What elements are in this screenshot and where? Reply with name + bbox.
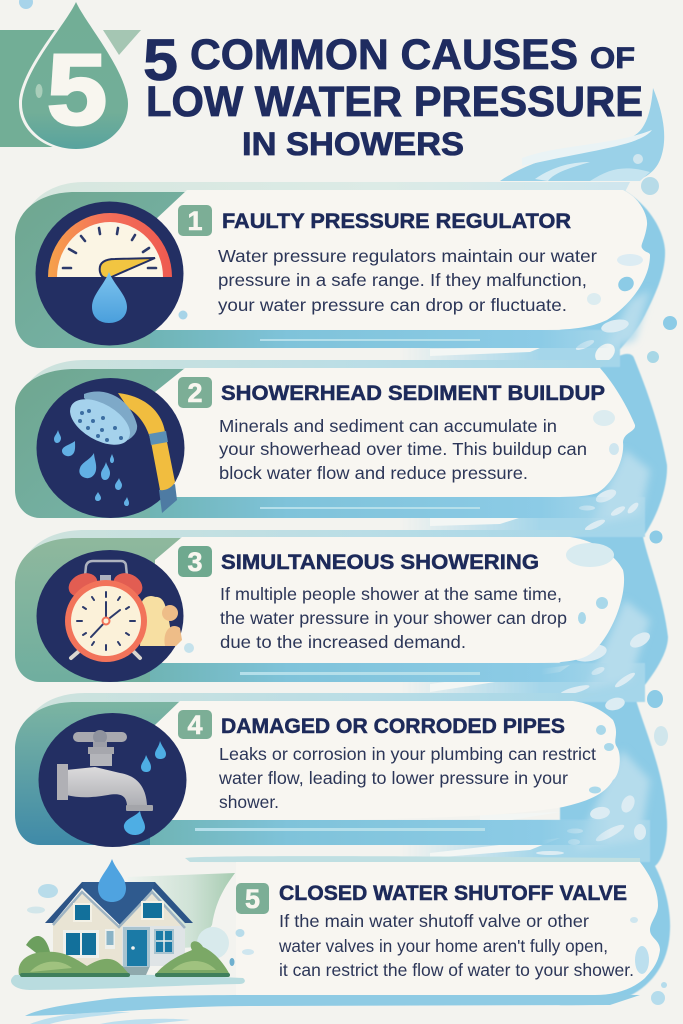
number badge 5 (236, 883, 269, 914)
panel: cause 3 (15, 530, 624, 682)
text block 2: Minerals and sediment can accumulate in (219, 416, 557, 436)
icon: house with water drop (11, 859, 254, 990)
number badge 2 (178, 377, 212, 408)
water highlights and bubbles (430, 317, 653, 858)
number badge 1: 1 (187, 206, 203, 236)
icon: dripping faucet (38, 713, 186, 847)
house bushes (19, 936, 230, 977)
text block 4: water flow, leading to lower pressure in your (218, 768, 568, 788)
text block 2 (219, 416, 587, 483)
number badge 3: 3 (187, 547, 203, 577)
lighter water washes (575, 290, 650, 850)
title (143, 28, 643, 162)
house walls (53, 892, 185, 966)
text block 1: pressure in a safe range. If they malfunction, (218, 270, 587, 290)
panel: cause 5 (25, 856, 660, 1024)
number badge 4 (178, 710, 212, 740)
icon: alarm clock and people (36, 550, 184, 682)
icon: pressure gauge (36, 202, 184, 346)
icon: showerhead (36, 378, 184, 518)
number badge 4: 4 (187, 710, 203, 740)
text block 5: If the main water shutoff valve or other (279, 911, 589, 931)
water stream along right side (400, 190, 670, 1005)
title: 5 (143, 28, 178, 93)
number badge 1 (178, 205, 212, 236)
panel: cause 1 (15, 182, 650, 348)
panel: cause 4 (15, 693, 620, 847)
heading 3: SIMULTANEOUS SHOWERING (221, 551, 539, 574)
top-right wave (500, 88, 664, 181)
heading 4: DAMAGED OR CORRODED PIPES (221, 715, 565, 738)
number badge 3 (178, 546, 212, 577)
heading 1: FAULTY PRESSURE REGULATOR (222, 210, 571, 233)
title: OF (590, 42, 635, 75)
heading 2: SHOWERHEAD SEDIMENT BUILDUP (221, 382, 605, 405)
header drop badge: 5 (47, 34, 107, 146)
text block 5 (278, 911, 634, 980)
water drop on roof (98, 859, 126, 902)
text block 3: due to the increased demand. (220, 632, 466, 652)
number badge 2: 2 (187, 378, 203, 408)
text block 4: shower. (219, 792, 279, 812)
title: IN SHOWERS (242, 126, 464, 162)
house roof (45, 882, 193, 925)
text block 4 (218, 744, 596, 812)
text block 3: the water pressure in your shower can drop (220, 608, 567, 628)
panel: cause 2 (15, 360, 635, 518)
header drop badge (0, 0, 141, 151)
text block 2: block water flow and reduce pressure. (219, 463, 528, 483)
text block 1 (218, 246, 597, 315)
text block 3: If multiple people shower at the same time, (220, 584, 562, 604)
title: LOW WATER PRESSURE (146, 78, 643, 126)
house windows and door (63, 901, 174, 967)
text block 4: Leaks or corrosion in your plumbing can restrict (219, 744, 596, 764)
text block 5: it can restrict the flow of water to your shower. (279, 960, 634, 980)
text block 5: water valves in your home aren't fully open, (278, 936, 608, 956)
text block 3 (220, 584, 567, 652)
text block 1: your water pressure can drop or fluctuate. (218, 295, 567, 315)
number badge 5: 5 (245, 884, 260, 914)
heading 5: CLOSED WATER SHUTOFF VALVE (279, 882, 627, 905)
title: COMMON CAUSES (190, 31, 578, 79)
text block 1: Water pressure regulators maintain our water (218, 246, 597, 266)
text block 2: your showerhead over time. This buildup can (219, 439, 587, 459)
